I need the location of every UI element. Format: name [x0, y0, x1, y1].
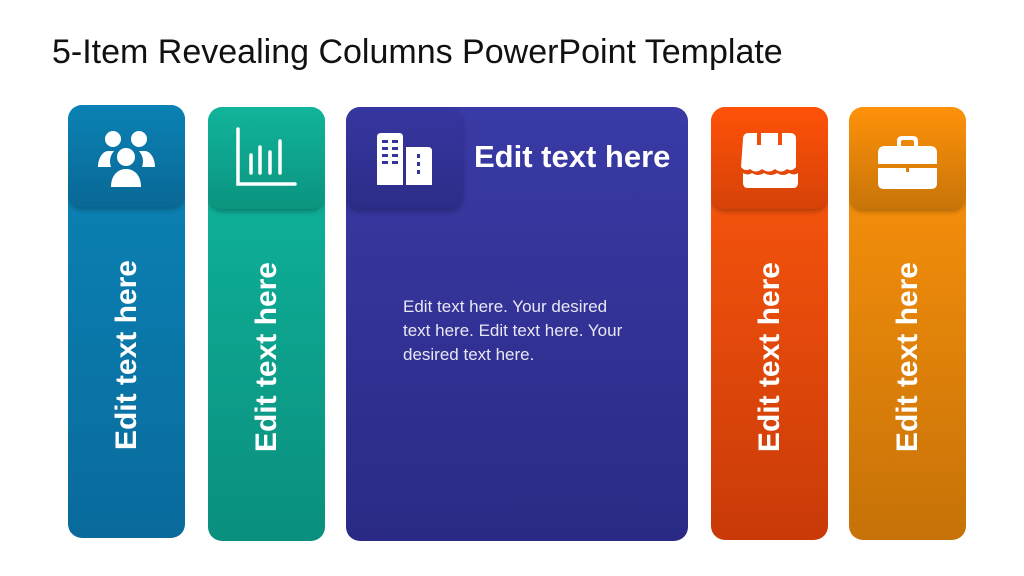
body text: Edit text here. Your desired: [403, 297, 607, 316]
vertical label: Edit text here: [890, 262, 924, 452]
panel: column 2: [208, 107, 325, 541]
vertical label: Edit text here: [250, 262, 282, 452]
panel: column 1: [68, 105, 185, 538]
header: column 5: [849, 107, 966, 209]
header: column 2: [208, 107, 325, 209]
body text: desired text here.: [403, 345, 534, 364]
body text: [403, 297, 622, 364]
vertical label: Edit text here: [110, 260, 142, 450]
header: column 4: [711, 107, 828, 209]
heading: Edit text here: [474, 139, 670, 174]
header: column 1: [68, 105, 185, 207]
header icon box: [346, 107, 463, 209]
vertical label: Edit text here: [752, 262, 786, 452]
panel: column 5: [849, 107, 966, 540]
panel: column 3 center: [346, 107, 688, 541]
title: 5-Item Revealing Columns PowerPoint Template: [52, 33, 783, 71]
panel: column 4: [711, 107, 828, 540]
body text: text here. Edit text here. Your: [403, 321, 622, 340]
